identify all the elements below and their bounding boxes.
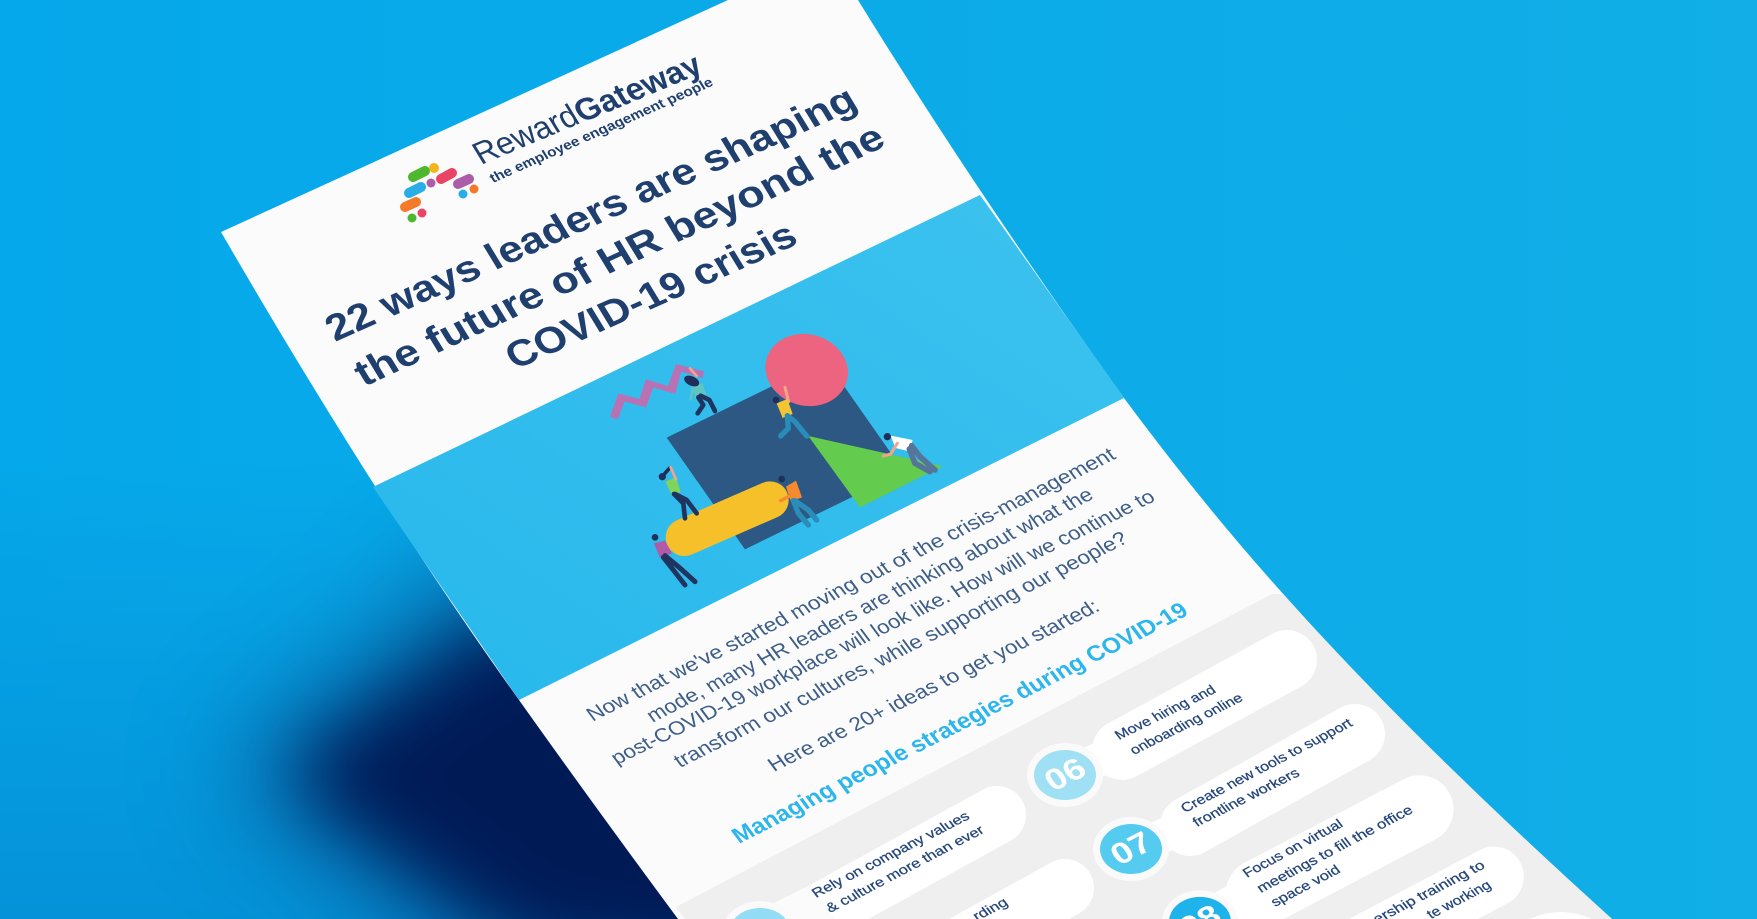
- title: 22 ways leaders are shaping: [318, 79, 864, 350]
- person with zigzag: [682, 368, 715, 413]
- list item 07: [1093, 715, 1355, 881]
- logo mark: [405, 163, 478, 222]
- list item 10: [1530, 912, 1592, 919]
- logo wordmark: Reward: [466, 98, 586, 172]
- list item 01: Rely on company values: [808, 808, 973, 900]
- list item 02: [949, 859, 1094, 919]
- section heading: Managing people strategies during COVID-19: [727, 598, 1193, 849]
- illustration: people arranging shapes: [610, 325, 943, 585]
- list item 08: meetings to fill the office: [1253, 802, 1416, 895]
- grey list section: [676, 594, 1700, 919]
- list item 07: Create new tools to support: [1177, 715, 1355, 815]
- intro paragraph: mode, many HR leaders are thinking about what the: [642, 484, 1098, 727]
- intro paragraph: post-COVID-19 workplace will look like. How will we continue to: [606, 486, 1159, 769]
- drop shadow of paper: [202, 536, 678, 919]
- intro paragraph: Now that we've started moving out of the crisis-management: [582, 444, 1120, 726]
- list item 07: 07: [1103, 824, 1159, 872]
- title: COVID-19 crisis: [498, 215, 805, 378]
- person lifting triangle: [883, 433, 935, 472]
- title: the future of HR beyond the: [347, 117, 892, 395]
- person in purple carrying pill: [652, 534, 695, 585]
- list item 06: onboarding online: [1126, 690, 1246, 757]
- list item 09: [1349, 847, 1524, 919]
- list item 07: frontline workers: [1189, 765, 1303, 829]
- logo tagline: the employee engagement people: [487, 75, 716, 186]
- list item 08: [1162, 775, 1453, 919]
- blue illustration band: [373, 195, 1124, 700]
- dark blue square: [667, 360, 904, 549]
- purple zigzag arrow: [610, 364, 704, 419]
- intro paragraph: Here are 20+ ideas to get you started:: [763, 596, 1104, 776]
- intro paragraph: transform our cultures, while supporting our people?: [669, 528, 1132, 772]
- person pushing circle: [773, 387, 807, 436]
- logo: Gateway: [567, 47, 709, 130]
- list item 01: & culture more than ever: [822, 822, 987, 915]
- green triangle: [808, 436, 943, 507]
- list item 01: [726, 786, 1026, 919]
- pink circle: [757, 325, 856, 415]
- paper sheet: [221, 0, 1612, 919]
- logo: [405, 47, 716, 222]
- list item 08: space void: [1267, 862, 1343, 909]
- person in orange pushing pill: [778, 476, 817, 525]
- list item 06: Move hiring and: [1111, 682, 1219, 742]
- person with binoculars: [659, 467, 697, 518]
- list item 08: Focus on virtual: [1239, 816, 1346, 880]
- list item 06: 06: [1037, 750, 1093, 798]
- yellow pill: [684, 500, 770, 537]
- list item 06: [1027, 660, 1287, 807]
